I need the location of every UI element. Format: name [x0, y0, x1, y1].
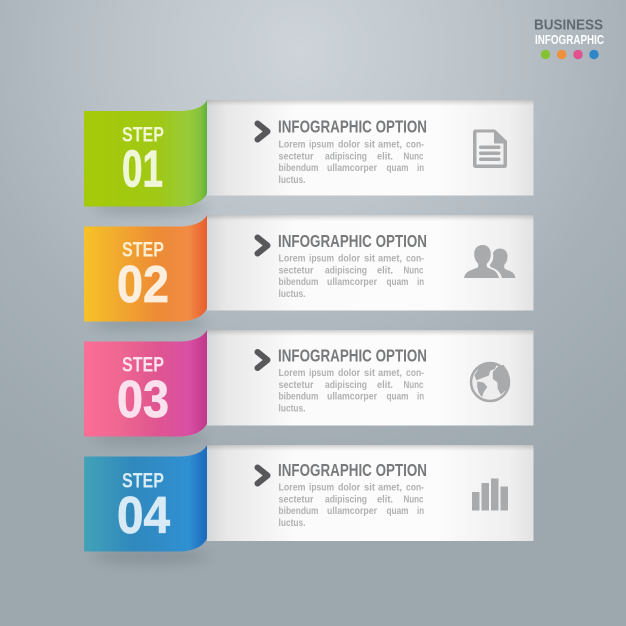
- body text 2: Nunc: [404, 265, 424, 276]
- icon: document: [473, 130, 507, 168]
- body text 1: ipsum: [309, 140, 334, 150]
- body text 3: amet,: [378, 368, 402, 379]
- body text 3: adipiscing: [325, 380, 367, 391]
- step 1 row: [84, 100, 534, 215]
- step number 2: 02: [117, 256, 169, 314]
- heading 4: INFOGRAPHIC OPTION: [278, 460, 427, 480]
- body text 3: [278, 368, 424, 414]
- body text 4: bibendum: [278, 506, 319, 517]
- step label 2: STEP: [122, 238, 164, 262]
- body text 1: Nunc: [404, 151, 424, 162]
- body text 2: luctus.: [278, 289, 306, 300]
- ribbon 2: [84, 215, 207, 322]
- body text 1: ullamcorper: [327, 163, 377, 174]
- ribbon shadow 3: [92, 431, 208, 445]
- body text 3: sectetur: [278, 380, 314, 391]
- body text 3: ipsum: [309, 368, 334, 379]
- ribbon shadow 1: [92, 201, 208, 215]
- body text 2: Lorem: [278, 254, 306, 264]
- panel 4: [207, 445, 534, 541]
- body text 1: sectetur: [278, 151, 314, 162]
- ribbon shadow 4: [92, 547, 208, 565]
- chevron 2: [258, 238, 268, 254]
- body text 4: ipsum: [309, 482, 334, 494]
- body text 1: Lorem: [278, 140, 306, 150]
- ribbon shadow 2: [92, 316, 208, 330]
- body text 3: Lorem: [278, 368, 306, 379]
- body text 2: dolor: [338, 254, 360, 264]
- step 4 row: [84, 445, 534, 565]
- step 3 row: [84, 330, 534, 445]
- step 2 row: [84, 215, 534, 330]
- body text 1: elit.: [377, 151, 393, 162]
- heading 3: INFOGRAPHIC OPTION: [278, 345, 427, 365]
- body text 4: amet,: [378, 482, 402, 494]
- body text 3: elit.: [377, 380, 393, 391]
- body text 2: sectetur: [278, 265, 314, 276]
- body text 1: dolor: [338, 140, 360, 150]
- step number 3: 03: [117, 371, 169, 429]
- ribbon 4: [84, 445, 207, 552]
- icon: bar chart: [472, 478, 508, 510]
- body text 1: con-: [406, 140, 424, 150]
- body text 3: ullamcorper: [327, 392, 377, 402]
- body text 1: [278, 140, 424, 186]
- chevron 4: [258, 468, 268, 484]
- body text 3: sit: [364, 368, 376, 379]
- body text 2: con-: [406, 254, 424, 264]
- body text 3: in: [417, 392, 424, 402]
- body text 1: sit: [364, 140, 376, 150]
- body text 2: bibendum: [278, 277, 319, 288]
- body text 2: ullamcorper: [327, 277, 377, 288]
- body text 4: Nunc: [404, 494, 424, 505]
- body text 4: sectetur: [278, 494, 314, 505]
- ribbon 1: [84, 100, 207, 206]
- panel 2: [207, 215, 534, 310]
- body text 2: adipiscing: [325, 265, 367, 276]
- body text 3: luctus.: [278, 404, 306, 414]
- body text 4: quam: [386, 506, 409, 517]
- body text 1: in: [417, 163, 424, 174]
- body text 2: elit.: [377, 265, 393, 276]
- header word: business: BUSINESS: [534, 16, 603, 34]
- body text 2: ipsum: [309, 254, 334, 264]
- header word: infographic: INFOGRAPHIC: [535, 32, 604, 47]
- body text 4: ullamcorper: [327, 506, 377, 517]
- header: business infographic: [534, 16, 604, 59]
- step label 3: STEP: [122, 352, 164, 376]
- body text 4: con-: [406, 482, 424, 494]
- heading 1: INFOGRAPHIC OPTION: [278, 116, 427, 136]
- heading 2: INFOGRAPHIC OPTION: [278, 231, 427, 251]
- body text 3: con-: [406, 368, 424, 379]
- body text 1: amet,: [378, 140, 402, 150]
- panel 1: [207, 100, 534, 196]
- body text 1: adipiscing: [325, 151, 367, 162]
- body text 4: Lorem: [278, 482, 306, 494]
- body text 1: bibendum: [278, 163, 319, 174]
- body text 2: [278, 254, 424, 300]
- body text 4: sit: [364, 482, 376, 494]
- body text 2: sit: [364, 254, 376, 264]
- body text 4: luctus.: [278, 518, 306, 529]
- body text 1: luctus.: [278, 175, 306, 186]
- body text 3: bibendum: [278, 392, 319, 402]
- body text 4: [278, 482, 424, 529]
- body text 3: dolor: [338, 368, 360, 379]
- body text 4: in: [417, 506, 424, 517]
- step label 4: STEP: [122, 468, 164, 492]
- step number 4: 04: [117, 487, 170, 545]
- body text 1: quam: [386, 163, 409, 174]
- chevron 3: [258, 352, 268, 368]
- body text 2: quam: [386, 277, 409, 288]
- icon: globe: [471, 363, 509, 401]
- icon: people: [464, 245, 516, 278]
- body text 2: amet,: [378, 254, 402, 264]
- colour dots: [541, 50, 599, 59]
- body text 4: elit.: [377, 494, 393, 505]
- body text 2: in: [417, 277, 424, 288]
- body text 4: adipiscing: [325, 494, 367, 505]
- chevron 1: [258, 124, 268, 140]
- body text 4: dolor: [338, 482, 360, 494]
- ribbon 3: [84, 330, 207, 436]
- step number 1: 01: [122, 140, 163, 198]
- body text 3: Nunc: [404, 380, 424, 391]
- body text 3: quam: [386, 392, 409, 402]
- step label 1: STEP: [122, 122, 164, 146]
- panel 3: [207, 330, 534, 426]
